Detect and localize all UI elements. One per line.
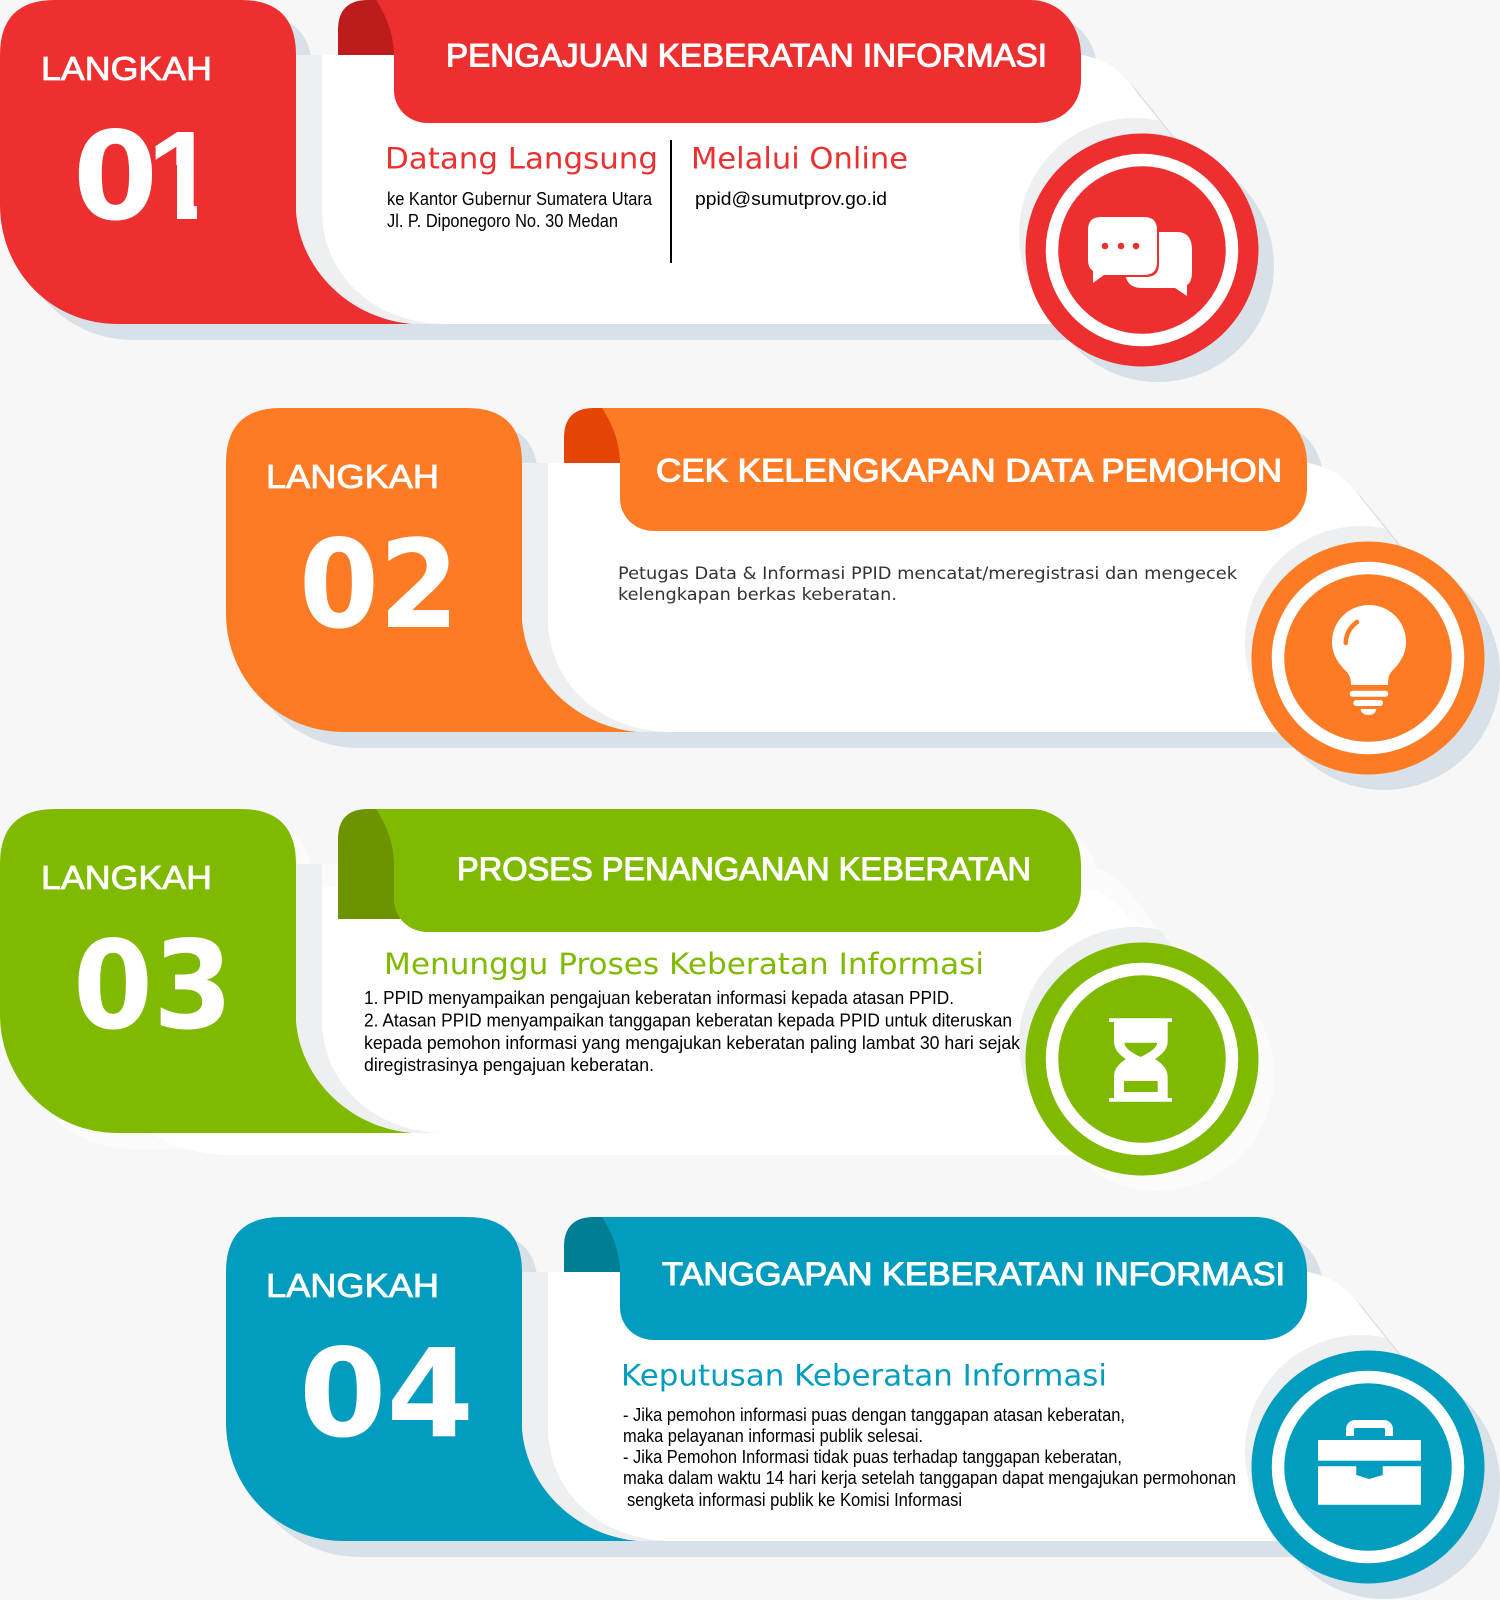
tab fold shadow: [522, 463, 671, 732]
icon: chat bubbles: [1026, 134, 1258, 366]
vertical divider: [670, 140, 672, 263]
heading text: CEK KELENGKAPAN DATA PEMOHON: [656, 452, 1282, 488]
email text: ppid@sumutprov.go.id: [695, 189, 887, 209]
circle halo: [1245, 526, 1397, 692]
white body: [322, 55, 1210, 324]
decision text: [623, 1405, 1236, 1510]
number 03: 03: [73, 915, 233, 1057]
number 01: [78, 128, 197, 220]
white body: [548, 1272, 1436, 1541]
subheading: Keputusan Keberatan Informasi: Keputusan Keberatan Informasi: [621, 1358, 1107, 1392]
subheading: Datang Langsung: Datang Langsung: [385, 142, 658, 176]
heading fold: [338, 0, 398, 55]
panel: langkah 04: [226, 1217, 1500, 1599]
heading banner: [376, 809, 1081, 932]
circle halo: [1019, 118, 1171, 284]
label: LANGKAH: LANGKAH: [41, 859, 212, 896]
panel: langkah 02: [226, 408, 1500, 790]
panel: langkah 01: [0, 0, 1274, 382]
step tab: [226, 408, 639, 732]
card shadow: [16, 16, 1274, 382]
description text: kelengkapan berkas keberatan.: [618, 585, 897, 605]
number 02: 02: [299, 514, 459, 656]
subheading: Menunggu Proses Keberatan Informasi: Menunggu Proses Keberatan Informasi: [384, 947, 984, 981]
subheading: Melalui Online: Melalui Online: [691, 142, 908, 176]
number 04: 04: [299, 1323, 474, 1465]
label: LANGKAH: LANGKAH: [266, 458, 439, 495]
heading text: PROSES PENANGANAN KEBERATAN: [457, 851, 1031, 887]
panel: langkah 03: [0, 809, 1274, 1191]
heading text: TANGGAPAN KEBERATAN INFORMASI: [662, 1256, 1285, 1292]
address text: [387, 189, 653, 231]
address text: Jl. P. Diponegoro No. 30 Medan: [387, 211, 618, 231]
step tab: [0, 809, 413, 1133]
circle halo: [1245, 1335, 1397, 1501]
heading banner: [602, 408, 1307, 531]
heading fold: [564, 1217, 624, 1272]
number 01: 0: [73, 106, 158, 248]
decision text: - Jika Pemohon Informasi tidak puas terhadap tanggapan keberatan,: [623, 1447, 1122, 1467]
address text: ke Kantor Gubernur Sumatera Utara: [387, 189, 653, 209]
description text: Petugas Data & Informasi PPID mencatat/meregistrasi dan mengecek: [618, 564, 1237, 584]
icon: light bulb: [1252, 542, 1484, 774]
white body: [548, 463, 1436, 732]
icon: hourglass: [1026, 942, 1258, 1176]
tab fold shadow: [296, 55, 445, 324]
decision text: - Jika pemohon informasi puas dengan tanggapan atasan keberatan,: [623, 1405, 1125, 1425]
heading fold: [564, 408, 624, 463]
decision text: maka dalam waktu 14 hari kerja setelah tanggapan dapat mengajukan permohonan: [623, 1468, 1236, 1488]
label: LANGKAH: LANGKAH: [266, 1267, 439, 1304]
numbered list text: 2. Atasan PPID menyampaikan tanggapan keberatan kepada PPID untuk diteruskan: [364, 1010, 1012, 1030]
numbered list text: [364, 988, 1021, 1075]
heading banner: [376, 0, 1081, 123]
tab fold shadow: [522, 1272, 671, 1541]
decision text: sengketa informasi publik ke Komisi Informasi: [627, 1490, 962, 1510]
numbered list text: diregistrasinya pengajuan keberatan.: [364, 1055, 654, 1075]
tab fold shadow: [296, 864, 445, 1133]
icon: briefcase: [1252, 1350, 1484, 1584]
decision text: maka pelayanan informasi publik selesai.: [623, 1426, 923, 1446]
step tab: [226, 1217, 639, 1541]
description text: [618, 564, 1237, 605]
heading banner: [602, 1217, 1307, 1340]
number 01: 1: [147, 105, 217, 246]
card shadow: [242, 1233, 1500, 1599]
circle halo: [1019, 927, 1171, 1093]
heading fold: [338, 809, 420, 919]
white body: [322, 887, 1210, 1133]
card shadow: [16, 825, 1274, 1191]
numbered list text: kepada pemohon informasi yang mengajukan keberatan paling lambat 30 hari sejak: [364, 1033, 1021, 1053]
numbered list text: 1. PPID menyampaikan pengajuan keberatan informasi kepada atasan PPID.: [364, 988, 954, 1008]
heading text: PENGAJUAN KEBERATAN INFORMASI: [446, 38, 1047, 74]
step tab: [0, 0, 413, 324]
white bottom band: [150, 1133, 1110, 1155]
card shadow: [242, 424, 1500, 790]
label: LANGKAH: LANGKAH: [41, 50, 212, 87]
